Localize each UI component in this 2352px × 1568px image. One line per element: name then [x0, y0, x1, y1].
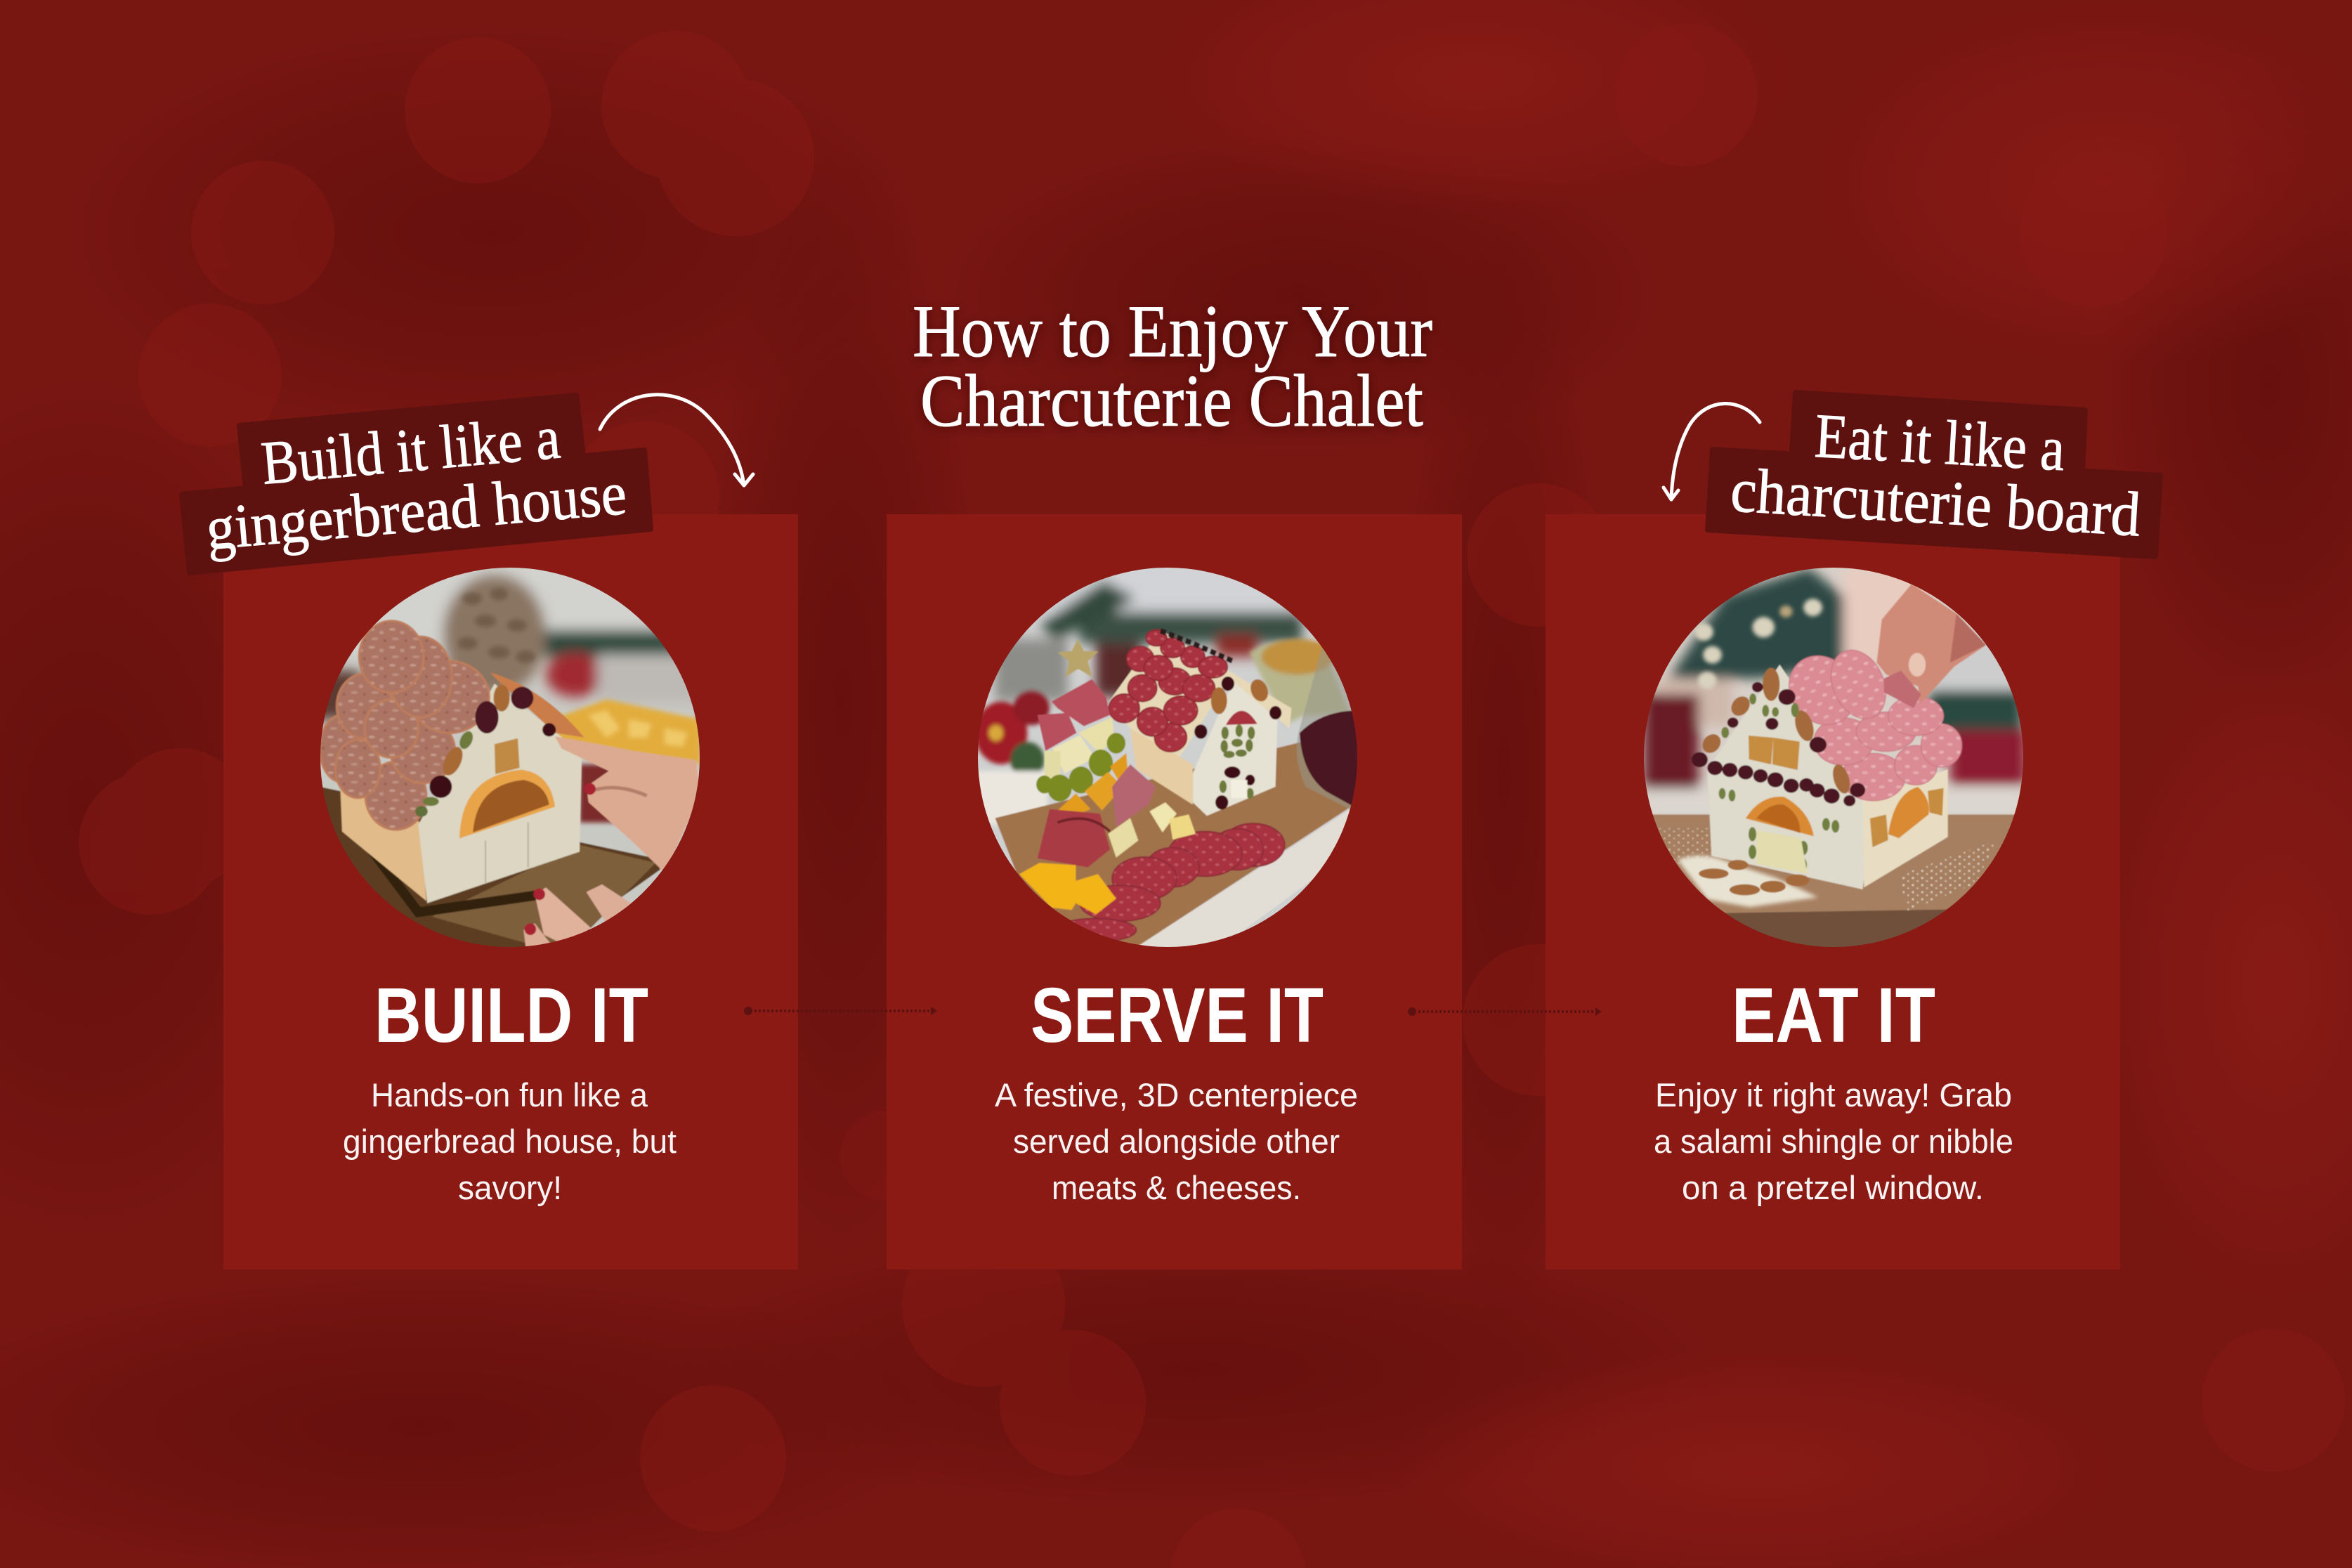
photo: eating the chalet: [1639, 564, 2027, 955]
title: Charcuterie Chalet: [920, 360, 1423, 442]
body text: build it: Hands-on fun like a: [371, 1076, 648, 1113]
body text: build it: [343, 1076, 677, 1206]
heading: eat it: EAT IT: [1732, 972, 1935, 1059]
label: build it like a gingerbread house: [182, 396, 651, 573]
title: [913, 290, 1432, 442]
panel: eat it: [1546, 514, 2120, 1269]
label: eat it like a charcuterie board: [1708, 393, 2160, 556]
body text: serve it: meats & cheeses.: [1052, 1169, 1301, 1206]
arrow: build to serve: [744, 1007, 937, 1015]
panel: build it: [223, 514, 798, 1269]
photo: building the chalet: [320, 568, 700, 947]
body text: eat it: Enjoy it right away! Grab: [1655, 1076, 2012, 1113]
label: eat it like a charcuterie board: Eat it like a: [1813, 401, 2067, 484]
panel: serve it: [887, 514, 1462, 1269]
arrow: eat label to card: [1664, 403, 1760, 499]
body text: eat it: a salami shingle or nibble: [1654, 1123, 2013, 1160]
title: How to Enjoy Your: [913, 290, 1432, 372]
label: eat it like a charcuterie board: charcuterie board: [1729, 455, 2143, 550]
body text: build it: gingerbread house, but: [343, 1123, 677, 1160]
arrow: build label to card: [600, 395, 753, 485]
photo: serving the chalet: [971, 558, 1366, 962]
body text: eat it: [1654, 1076, 2013, 1206]
heading: build it: BUILD IT: [374, 972, 648, 1059]
body text: build it: savory!: [458, 1169, 562, 1206]
heading: serve it: SERVE IT: [1031, 972, 1324, 1059]
body text: serve it: served alongside other: [1013, 1123, 1340, 1160]
body text: serve it: [995, 1076, 1358, 1206]
arrow: serve to eat: [1408, 1007, 1602, 1016]
label: build it like a gingerbread house: Build it like a: [259, 403, 563, 498]
label: build it like a gingerbread house: gingerbread house: [203, 459, 629, 563]
body text: eat it: on a pretzel window.: [1682, 1169, 1984, 1206]
body text: serve it: A festive, 3D centerpiece: [995, 1076, 1358, 1113]
